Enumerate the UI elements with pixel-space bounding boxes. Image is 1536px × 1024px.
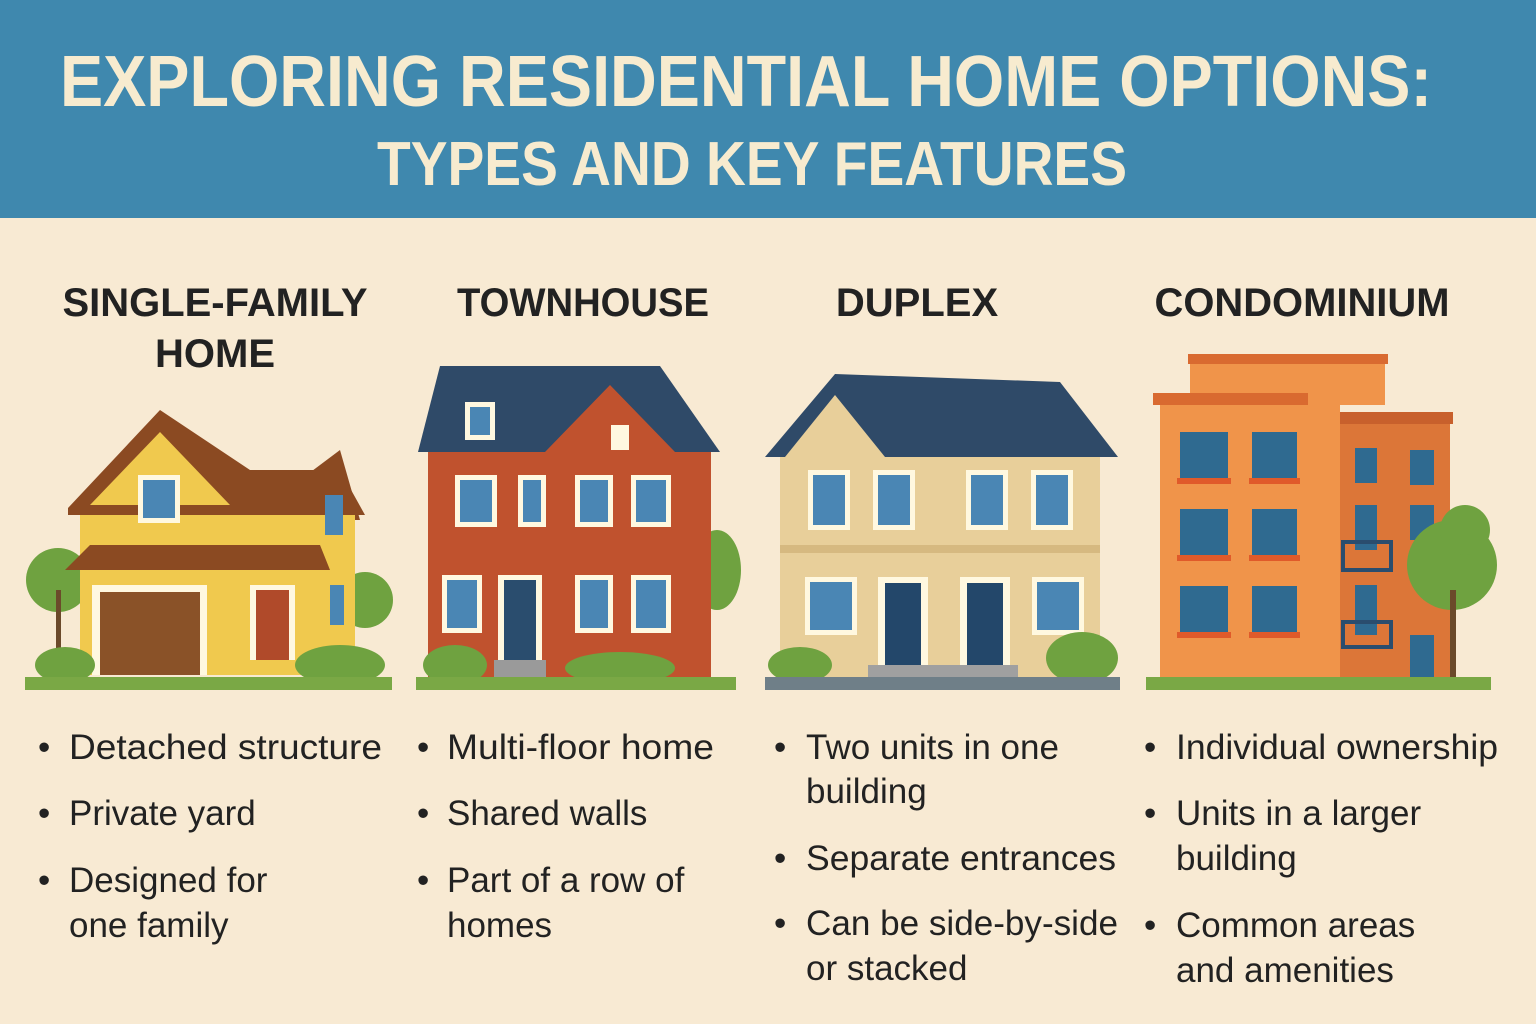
bullets: duplex: • <box>774 904 786 943</box>
bullets: duplex: or stacked <box>806 949 967 988</box>
bullets: duplex: • <box>774 728 786 767</box>
heading: condominium: CONDOMINIUM <box>1154 281 1450 325</box>
bullets: condominium: Common areas <box>1176 906 1415 945</box>
bullets: duplex: • <box>774 839 786 878</box>
bullets: townhouse: homes <box>447 906 552 945</box>
bullets: single-family: Private yard <box>69 794 256 833</box>
bullets: townhouse: Shared walls <box>447 794 647 833</box>
bullets: single-family: Detached structure <box>69 728 382 767</box>
bullets: single-family: • <box>38 794 50 833</box>
illustration: townhouse <box>416 366 741 690</box>
bullets: condominium <box>1144 728 1498 990</box>
column: single-family <box>25 281 393 945</box>
bullets: single-family: Designed for <box>69 861 268 900</box>
bullets: condominium: Individual ownership <box>1176 728 1498 767</box>
illustration: duplex <box>765 374 1120 690</box>
bullets: condominium: • <box>1144 906 1156 945</box>
bullets: single-family: one family <box>69 906 229 945</box>
bullets: condominium: building <box>1176 839 1297 878</box>
bullets: duplex: building <box>806 772 927 811</box>
heading: single-family <box>62 281 368 376</box>
heading: single-family: HOME <box>155 332 275 376</box>
bullets: townhouse: • <box>417 794 429 833</box>
heading: duplex: DUPLEX <box>836 281 998 325</box>
bullets: townhouse: Part of a row of <box>447 861 685 900</box>
bullets: condominium: • <box>1144 728 1156 767</box>
illustration: single-family house <box>25 410 393 690</box>
bullets: condominium: Units in a larger <box>1176 794 1421 833</box>
bullets: single-family: • <box>38 728 50 767</box>
bullets: townhouse: • <box>417 861 429 900</box>
column: duplex <box>765 281 1120 988</box>
illustration: condominium <box>1146 354 1497 690</box>
column: condominium <box>1144 281 1498 990</box>
bullets: single-family <box>38 728 382 945</box>
bullets: duplex: Two units in one <box>806 728 1059 767</box>
bullets: townhouse: Multi-floor home <box>447 728 714 767</box>
bullets: single-family: • <box>38 861 50 900</box>
bullets: condominium: • <box>1144 794 1156 833</box>
heading: townhouse: TOWNHOUSE <box>457 281 709 325</box>
column: townhouse <box>416 281 741 945</box>
bullets: duplex: Can be side-by-side <box>806 904 1118 943</box>
heading: single-family: SINGLE-FAMILY <box>62 281 368 325</box>
bullets: duplex <box>774 728 1118 988</box>
bullets: townhouse <box>417 728 714 945</box>
subtitle: TYPES AND KEY FEATURES <box>377 130 1127 199</box>
bullets: condominium: and amenities <box>1176 951 1394 990</box>
bullets: duplex: Separate entrances <box>806 839 1116 878</box>
bullets: townhouse: • <box>417 728 429 767</box>
header band <box>0 0 1536 218</box>
